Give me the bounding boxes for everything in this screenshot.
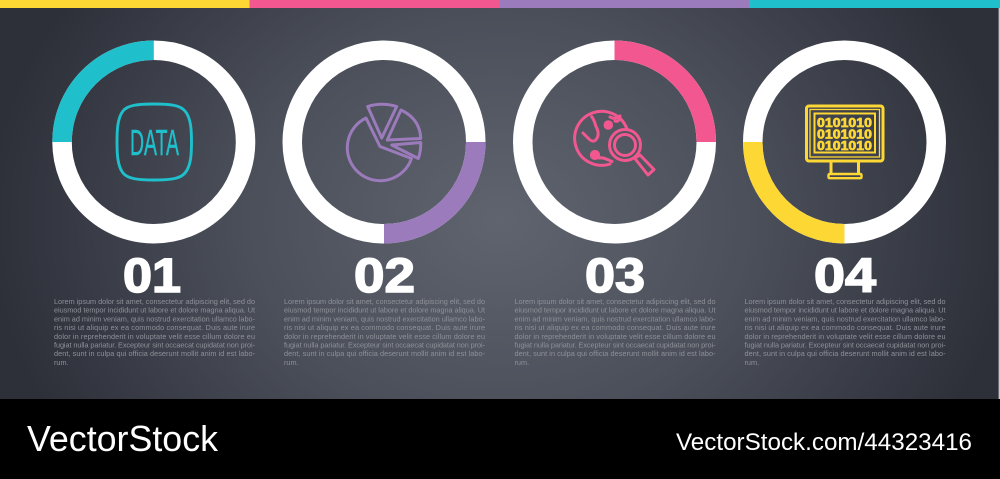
text block 03: dent, sunt in culpa qui officia deserunt mollit anim id est labo- [514,349,716,358]
footer logo: VectorStock [27,418,219,459]
text block 01: Lorem ipsum dolor sit amet, consectetur adipiscing elit, sed do [54,297,255,306]
text block 04: dolor in reprehenderit in voluptate velit esse cillum dolore eu [744,332,946,341]
number 03: 03 [585,250,645,303]
text block 02: rum. [284,358,299,367]
text block 01: ris nisi ut aliquip ex ea commodo consequat. Duis aute irure [54,323,255,332]
text block 01: dent, sunt in culpa qui officia deserunt mollit anim id est labo- [54,349,256,358]
ring 01 [62,50,246,234]
text block 03: rum. [514,358,529,367]
text block 04: fugiat nulla pariatur. Excepteur sint occaecat cupidatat non proi- [744,340,946,350]
text block 01: fugiat nulla pariatur. Excepteur sint occaecat cupidatat non proi- [54,340,256,350]
ring 03 [523,50,706,234]
text block 02: dent, sunt in culpa qui officia deserunt mollit anim id est labo- [284,349,486,358]
text block 04: rum. [744,358,759,367]
text block 03: Lorem ipsum dolor sit amet, consectetur adipiscing elit, sed do [514,297,716,306]
text block 02: enim ad minim veniam, quis nostrud exercitation ullamco labo- [284,314,486,323]
icon: binary monitor [806,106,883,178]
text block 03: enim ad minim veniam, quis nostrud exercitation ullamco labo- [514,314,716,323]
text block 02: ris nisi ut aliquip ex ea commodo consequat. Duis aute irure [284,323,485,332]
panel: step 04 [744,50,946,367]
icon: data badge [117,104,192,180]
text block 03: dolor in reprehenderit in voluptate velit esse cillum dolore eu [514,332,716,341]
text block 03 [514,297,716,367]
text block 03: eiusmod tempor incididunt ut labore et dolore magna aliqua. Ut [514,306,716,315]
icon: binary monitor: 0101010 [817,128,872,142]
text block 02: fugiat nulla pariatur. Excepteur sint occaecat cupidatat non proi- [284,340,486,350]
ring 04 [753,50,936,234]
text block 01: enim ad minim veniam, quis nostrud exercitation ullamco labo- [54,314,256,323]
text block 04: ris nisi ut aliquip ex ea commodo consequat. Duis aute irure [744,323,946,332]
text block 03: ris nisi ut aliquip ex ea commodo consequat. Duis aute irure [514,323,716,332]
icon: globe with magnifier [575,111,654,175]
text block 01: eiusmod tempor incididunt ut labore et dolore magna aliqua. Ut [54,306,255,315]
number 02: 02 [354,250,415,303]
text block 02 [284,297,486,367]
text block 02: eiusmod tempor incididunt ut labore et dolore magna aliqua. Ut [284,306,485,315]
icon: data badge: DATA [130,122,179,163]
ring 02 [292,50,476,234]
text block 04 [744,297,946,367]
icon: pie chart [347,104,421,181]
text block 04: enim ad minim veniam, quis nostrud exercitation ullamco labo- [744,314,946,323]
text block 01: dolor in reprehenderit in voluptate velit esse cillum dolore eu [54,332,255,341]
footer band [0,399,1000,479]
top colour bar [0,0,1000,8]
text block 04: Lorem ipsum dolor sit amet, consectetur adipiscing elit, sed do [744,297,946,306]
icon: binary monitor: 0101010 [817,139,872,153]
number 04: 04 [814,250,876,303]
text block 04: eiusmod tempor incididunt ut labore et dolore magna aliqua. Ut [744,306,946,315]
text block 01 [54,297,256,367]
footer url: VectorStock.com/44323416 [676,429,972,456]
text block 02: Lorem ipsum dolor sit amet, consectetur adipiscing elit, sed do [284,297,485,306]
panel: step 03 [514,50,716,367]
panel: step 02 [284,50,486,367]
number 01: 01 [123,250,181,303]
text block 04: dent, sunt in culpa qui officia deserunt mollit anim id est labo- [744,349,946,358]
text block 02: dolor in reprehenderit in voluptate velit esse cillum dolore eu [284,332,485,341]
text block 03: fugiat nulla pariatur. Excepteur sint occaecat cupidatat non proi- [514,340,716,350]
panel: step 01 [54,50,256,367]
text block 01: rum. [54,358,69,367]
icon: binary monitor: 0101010 [817,116,872,130]
